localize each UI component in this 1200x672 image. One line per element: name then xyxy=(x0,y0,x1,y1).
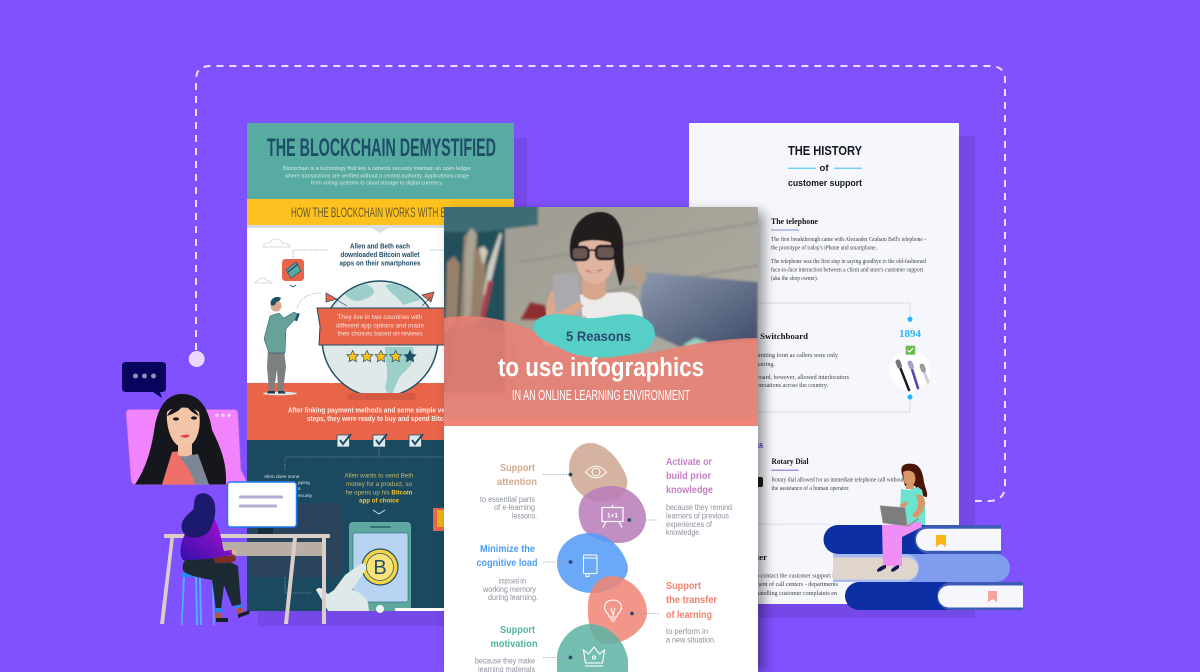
text block: minimize cognitive load xyxy=(476,543,538,602)
portrait of woman xyxy=(135,394,226,484)
text block: support transfer: the transfer xyxy=(666,594,717,606)
bottom book xyxy=(845,582,1023,610)
decorative clouds and dotted lines xyxy=(255,239,444,308)
text block: rotary dial: Rotary Dial xyxy=(772,457,809,466)
text block: minimize cognitive load: imposed on xyxy=(499,576,526,586)
icon: rating stars xyxy=(347,350,416,362)
banner: two countries: their choices based on reviews xyxy=(338,330,423,338)
text block: switchboard: Telephone Switchboard xyxy=(720,331,808,341)
text block: support motivation xyxy=(475,624,538,672)
stool xyxy=(181,573,215,625)
text block: Allen research: pping xyxy=(298,480,310,486)
panel: customer support history xyxy=(689,123,959,604)
text block: minimize cognitive load: cognitive load xyxy=(476,557,538,569)
illustration: desk scene xyxy=(122,362,330,625)
panel: online learning infographic xyxy=(440,203,762,672)
text block: activate prior knowledge: learners of previous xyxy=(666,512,729,520)
text block: activate prior knowledge: experiences of xyxy=(666,520,713,529)
banner: two countries xyxy=(317,308,446,345)
text block: linking payment xyxy=(288,406,472,423)
text block: support motivation: motivation xyxy=(490,638,538,650)
heading: history title: THE HISTORY xyxy=(788,143,862,158)
middle book xyxy=(833,554,1010,582)
text block: linking payment: After linking payment methods and some simple verification xyxy=(288,406,472,415)
icon: checkboxes xyxy=(337,434,423,447)
dotted flow lines xyxy=(285,448,444,593)
text block: minimize cognitive load: Minimize the xyxy=(480,543,535,555)
icon: crown xyxy=(584,647,604,666)
text block: Allen wants to send xyxy=(344,473,414,505)
icon: eye xyxy=(586,466,606,478)
text block: minimize cognitive load: during learning. xyxy=(488,593,538,602)
text block: support transfer: Support xyxy=(666,580,701,592)
text block: the telephone: (aka the shop owner). xyxy=(771,275,819,282)
text block: call center: development of call centers - departments xyxy=(736,581,839,588)
text block: switchboard: to hold conversations across the country. xyxy=(729,383,828,389)
shape: teal blob xyxy=(534,314,655,358)
text block: Allen wants to send: he opens up his Bitcoin xyxy=(346,490,412,497)
text block: Allen research: ecurity xyxy=(298,493,313,499)
translucent block xyxy=(249,503,342,577)
coral strip xyxy=(444,418,758,426)
icon: flags xyxy=(326,292,434,306)
text block: the telephone: The telephone xyxy=(771,217,818,226)
text block: blockchain intro: from voting systems to cloud storage to digital currency. xyxy=(311,181,443,187)
text block: support transfer: a new situation. xyxy=(666,636,716,644)
text block: rotary dial: Rotary dial allowed for an immediate telephone call without xyxy=(772,477,904,484)
text block: call center: dedicated to handling customer complaints en xyxy=(725,591,837,597)
text block: support attention: attention xyxy=(497,476,537,488)
subheading: online learning: IN AN ONLINE LEARNING ENVIRONMENT xyxy=(512,387,690,404)
text block: linking payment: steps, they were ready to buy and spend Bitcoin xyxy=(307,414,453,423)
heading: history title: of xyxy=(820,163,829,174)
text block: Allen wants to send: money for a product, so xyxy=(346,481,412,488)
banner: two countries: They live in two countries with xyxy=(338,314,423,321)
text block: blockchain intro: where transactions are verified without a central authority. Applications range xyxy=(284,174,470,180)
text block: switchboard xyxy=(720,331,850,389)
icon: lightbulb xyxy=(605,600,621,621)
text block: call center: To contact the customer support led to xyxy=(753,574,846,580)
icon: whiteboard: 1+1 xyxy=(607,512,618,520)
icon: cables xyxy=(898,362,928,390)
text block: support attention: to essential parts xyxy=(480,495,535,504)
desk xyxy=(160,534,330,624)
text block: support transfer xyxy=(666,580,717,644)
text block: activate prior knowledge: because they remind xyxy=(666,503,732,512)
text block: the telephone: The first breakthrough came with Alexander Graham Bell's telephone - xyxy=(771,236,926,243)
text block: support transfer: of learning xyxy=(666,609,712,621)
icon: rotary phone fragment xyxy=(755,477,763,487)
video call window xyxy=(126,394,250,488)
text block: Allen research: Allen does some xyxy=(264,474,300,480)
text block: activate prior knowledge: knowledge. xyxy=(666,528,701,537)
dashed connector path xyxy=(189,66,1005,509)
text block: activate prior knowledge: build prior xyxy=(666,470,711,482)
text block: activate prior knowledge: knowledge xyxy=(666,484,713,496)
text block: support motivation: because they make xyxy=(475,656,535,666)
heading: history title xyxy=(788,143,863,189)
banner: two countries: different app options and made xyxy=(336,322,424,330)
icon: pointing hand xyxy=(316,564,369,611)
text block: wallet apps: apps on their smartphones xyxy=(340,259,420,268)
text block: blockchain intro: Blockchain is a technology that lets a network securely maintain an open ledger xyxy=(283,166,471,172)
text block: minimize cognitive load: working memory xyxy=(482,585,536,594)
center panel shadow xyxy=(450,212,764,672)
figure: woman with laptop xyxy=(877,464,927,572)
panel: blockchain infographic xyxy=(247,123,514,613)
illustration: stack of books xyxy=(824,464,1023,610)
figure: man with phone xyxy=(263,297,300,395)
globe shadow xyxy=(347,393,416,400)
heading: blockchain title: THE BLOCKCHAIN DEMYSTIFIED xyxy=(267,134,496,162)
text block: support motivation: Support xyxy=(500,624,535,636)
photo: woman with phone xyxy=(440,203,762,430)
monitor xyxy=(228,482,296,534)
text block: wallet apps: Allen and Beth each xyxy=(350,242,410,251)
text block: support attention: of e-learning xyxy=(494,503,535,512)
text block: wallet apps xyxy=(340,242,420,268)
small wallet item xyxy=(433,508,445,531)
heading: how it works: HOW THE BLOCKCHAIN WORKS WITH BITCOIN xyxy=(291,204,473,220)
text block: switchboard: pairing. xyxy=(756,362,775,368)
icon: smartphone with bitcoin: B xyxy=(373,557,387,579)
timeline frame xyxy=(700,303,910,412)
text block: switchboard: It had a limiting form as callers were only xyxy=(736,352,839,359)
text block: call center: Call Center xyxy=(723,552,767,562)
text block: Allen wants to send: Allen wants to send Beth xyxy=(344,473,414,480)
icon: book xyxy=(584,555,597,576)
icon: whiteboard xyxy=(602,505,623,528)
text block: the telephone: face-to-face interaction between a client and store's customer support xyxy=(771,266,923,274)
icon: payment card xyxy=(282,259,304,287)
chart: five reasons blobs xyxy=(543,443,660,672)
text block: the telephone xyxy=(771,217,926,282)
text block: the telephone: the prototype of today's iPhone and smartphone. xyxy=(771,244,878,252)
chevron xyxy=(373,510,385,514)
text block: Allen research xyxy=(264,474,313,499)
text block: rotary dial: the assistance of a human operator. xyxy=(772,485,850,492)
text block: Allen wants to send: app of choice xyxy=(359,498,399,505)
text block: support transfer: to perform in xyxy=(666,627,708,636)
icon: smartphone with bitcoin xyxy=(349,522,444,613)
text block: Allen research: s. xyxy=(298,487,302,492)
heading: history title: customer support xyxy=(788,178,863,189)
panel shadows xyxy=(258,136,975,626)
text block: blockchain intro xyxy=(283,166,471,187)
text block: support attention: Support xyxy=(500,462,535,474)
timeline: 1894: 1894 xyxy=(899,328,922,340)
collage illustration xyxy=(122,65,1023,672)
coral wave xyxy=(444,316,758,418)
text block: support attention xyxy=(480,462,537,520)
text block: call center xyxy=(723,552,846,597)
text block: rotary dial xyxy=(772,457,904,492)
text block: the telephone: The telephone was the first step in saying goodbye to the old-fashioned xyxy=(771,258,926,265)
heading: 5 reasons: 5 Reasons xyxy=(566,328,631,344)
text block: wallet apps: downloaded Bitcoin wallet xyxy=(340,250,420,259)
chat bubble xyxy=(122,362,166,398)
text block: switchboard: The switchboard, however, allowed interlocutors xyxy=(730,375,850,381)
top book xyxy=(824,525,1001,554)
icon: globe xyxy=(322,281,438,397)
text block: activate prior knowledge xyxy=(666,456,732,537)
divider xyxy=(700,524,830,525)
connectors xyxy=(543,474,660,658)
heading fragment: section: Modems xyxy=(726,440,763,451)
heading: to use infographics: to use infographics xyxy=(498,354,704,382)
figure: seated woman xyxy=(180,493,250,622)
timeline: 1894 xyxy=(890,317,930,400)
text block: activate prior knowledge: Activate or xyxy=(666,456,712,468)
text block: support attention: lessons. xyxy=(512,512,537,520)
